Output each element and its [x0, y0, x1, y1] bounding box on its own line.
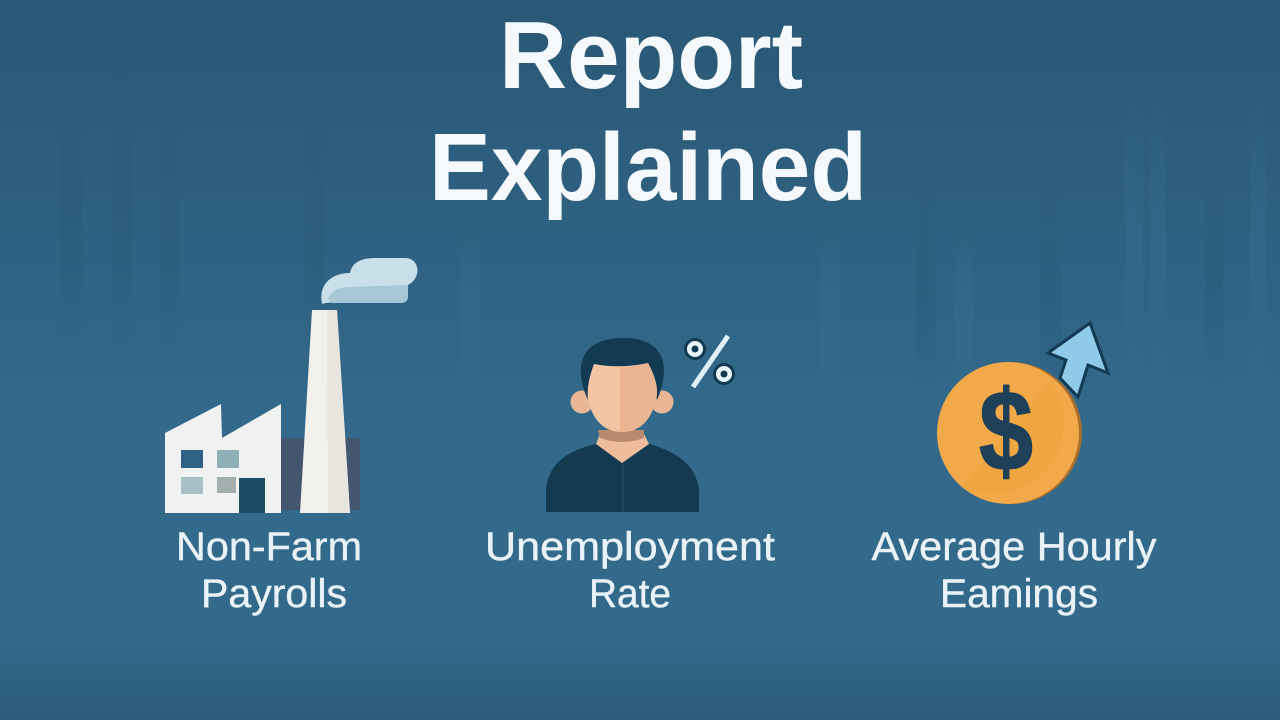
icon: percent sign [684, 336, 735, 387]
label: Unemployment Rate: Unemployment [485, 525, 775, 569]
icon: person with percent [546, 338, 699, 512]
label: Average Hourly Earnings [872, 525, 1156, 616]
title: Report [499, 2, 803, 109]
label: Unemployment Rate: Rate [589, 572, 671, 616]
label: Non-Farm Payrolls [176, 525, 362, 616]
title: Explained [429, 114, 867, 221]
icon: coin with rising arrow [937, 323, 1108, 504]
title [429, 2, 867, 221]
label: Non-Farm Payrolls: Payrolls [201, 572, 347, 616]
label: Unemployment Rate [485, 525, 775, 616]
label: Average Hourly Earnings: Average Hourly [872, 525, 1156, 569]
label: Non-Farm Payrolls: Non-Farm [176, 525, 362, 569]
icon: factory [165, 258, 417, 513]
label: Average Hourly Earnings: Eamings [940, 572, 1098, 616]
dollar sign: $ [979, 368, 1033, 495]
